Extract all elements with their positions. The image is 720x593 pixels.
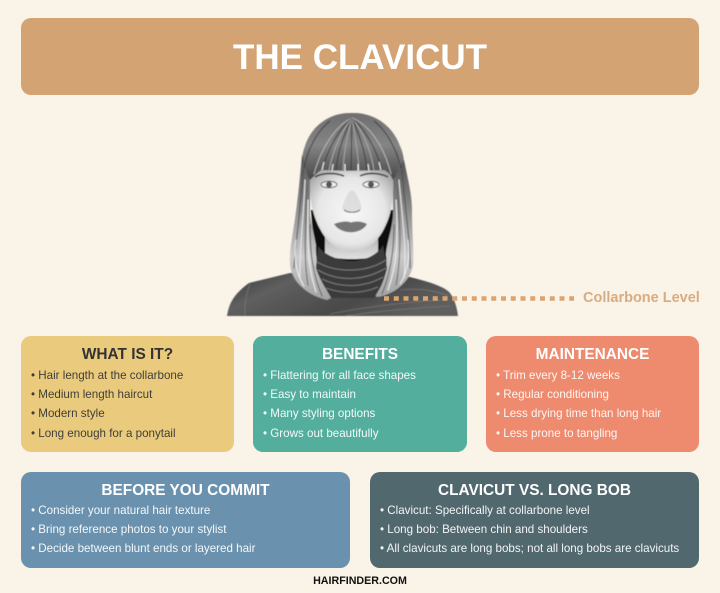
- fringe: [305, 116, 399, 180]
- list item: • Clavicut: Specifically at collarbone level: [380, 504, 590, 517]
- heading: benefits: BENEFITS: [322, 346, 398, 362]
- panel: what is it: [21, 336, 234, 452]
- title banner: THE CLAVICUT: [233, 38, 487, 77]
- footer source: HAIRFINDER.COM: [313, 575, 407, 587]
- list item: • Long enough for a ponytail: [31, 426, 176, 440]
- sweater shoulders: [227, 273, 458, 316]
- list item: • Regular conditioning: [496, 388, 609, 400]
- list item: • Modern style: [31, 406, 105, 420]
- panel: before you commit: [21, 472, 350, 568]
- list item: • All clavicuts are long bobs; not all long bobs are clavicuts: [380, 542, 679, 555]
- nose: [342, 190, 362, 212]
- list item: • Long bob: Between chin and shoulders: [380, 523, 588, 536]
- list item: • Trim every 8-12 weeks: [496, 368, 620, 382]
- list item: • Consider your natural hair texture: [31, 504, 210, 517]
- list item: • Less drying time than long hair: [496, 406, 661, 420]
- face: [310, 170, 393, 252]
- right hair strands: [382, 170, 410, 294]
- panel: maintenance: [486, 336, 699, 452]
- neck: [325, 225, 378, 259]
- right hair panel: [375, 160, 413, 297]
- collarbone level label: Collarbone Level: [583, 290, 700, 306]
- eyebrows: [315, 173, 344, 177]
- sweater folds: [245, 284, 450, 316]
- list item: • Bring reference photos to your stylist: [31, 523, 226, 536]
- eyes: [321, 181, 337, 188]
- list item: • Easy to maintain: [263, 388, 356, 400]
- heading: clavicut vs long bob: CLAVICUT VS. LONG BOB: [438, 482, 631, 498]
- list item: • Many styling options: [263, 406, 375, 420]
- turtleneck: [316, 245, 387, 298]
- panel: benefits: [253, 336, 467, 452]
- turtleneck folds: [317, 260, 386, 292]
- lips: [334, 222, 367, 232]
- title banner: [21, 18, 699, 95]
- list item: • Decide between blunt ends or layered hair: [31, 542, 255, 555]
- list item: • Medium length haircut: [31, 388, 152, 400]
- illustration: woman with clavicut hair: [226, 112, 459, 317]
- heading: maintenance: MAINTENANCE: [536, 346, 649, 362]
- list item: • Grows out beautifully: [263, 426, 379, 440]
- left hair strands: [294, 170, 322, 296]
- fringe blunt-end highlights: [322, 162, 381, 171]
- heading: before you commit: BEFORE YOU COMMIT: [101, 482, 270, 498]
- heading: what is it: WHAT IS IT?: [82, 346, 173, 362]
- panel: clavicut vs long bob: [370, 472, 699, 568]
- list item: • Flattering for all face shapes: [263, 368, 416, 382]
- list item: • Less prone to tangling: [496, 426, 617, 440]
- left hair panel: [290, 155, 331, 300]
- list item: • Hair length at the collarbone: [31, 368, 183, 382]
- fringe strands: [304, 118, 401, 174]
- crown of hair: [301, 113, 405, 190]
- dark hair interior: [311, 210, 394, 275]
- collarbone level dotted line: [384, 296, 574, 301]
